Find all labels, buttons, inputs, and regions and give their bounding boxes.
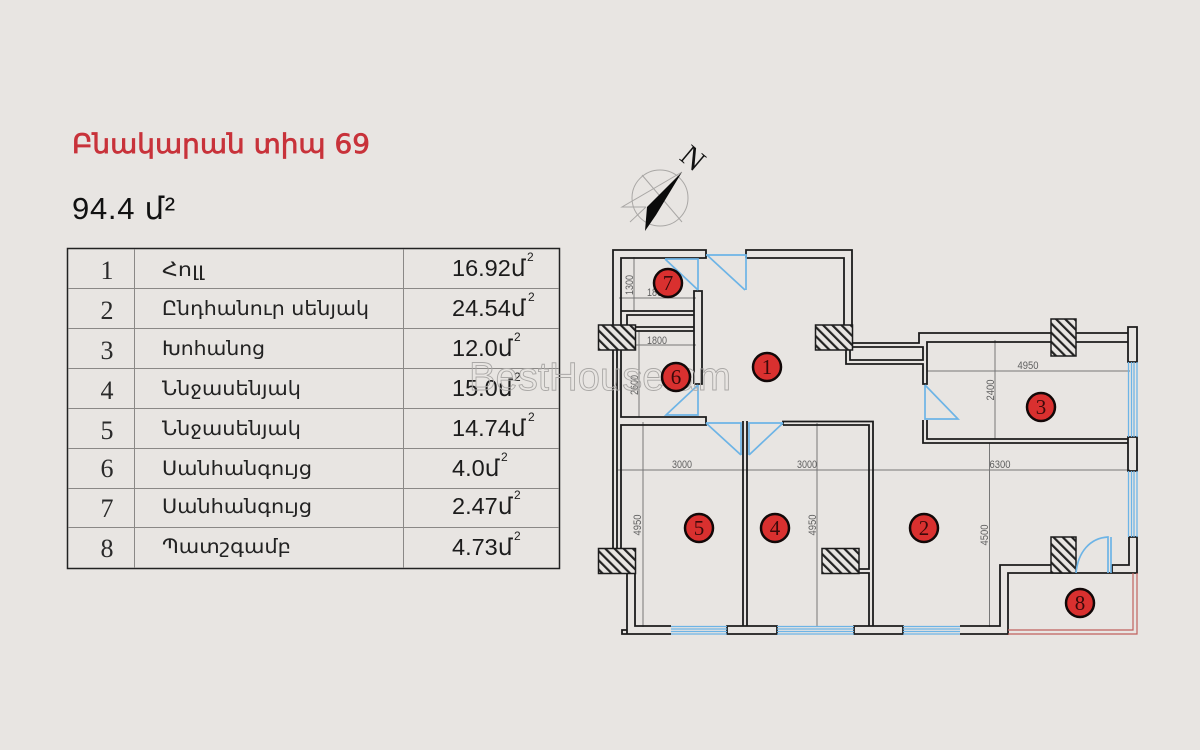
dimension lines: 1800 <box>647 335 667 347</box>
row 7: Սանհանգույց <box>162 495 312 518</box>
dimension lines: 4950 <box>632 514 644 536</box>
row 1: 16.92մ <box>452 255 527 281</box>
row 2: Ընդհանուր սենյակ <box>162 297 369 320</box>
watermark: BestHouse.am <box>469 355 731 399</box>
row 2 <box>100 290 535 325</box>
marker 2 <box>910 514 938 542</box>
balcony railing <box>1008 573 1137 634</box>
row 8 <box>100 529 521 563</box>
row 6: Սանհանգույց <box>162 457 312 480</box>
dimension lines: 4500 <box>979 524 991 546</box>
dimension lines: 2400 <box>985 380 997 400</box>
marker 4: 4 <box>770 516 781 540</box>
row 7: 2 <box>514 488 521 502</box>
row 3: 12.0մ <box>452 335 514 361</box>
row 4: Ննջասենյակ <box>162 377 301 400</box>
row 4: 2 <box>514 370 521 384</box>
marker 8: 8 <box>1075 591 1085 615</box>
row 1: 1 <box>100 256 114 285</box>
marker 2: 2 <box>919 516 929 540</box>
row 1: Հոլլ <box>162 258 205 281</box>
marker 1: 1 <box>762 355 772 379</box>
marker 1 <box>753 353 781 381</box>
row 1 <box>100 250 534 285</box>
row 8: 8 <box>100 534 114 563</box>
row 5: 2 <box>528 410 535 424</box>
row 8: Պատշգամբ <box>162 535 291 558</box>
marker 3 <box>1027 393 1055 421</box>
row 2: 24.54մ <box>452 295 527 321</box>
total area: 94.4 մ² <box>72 191 176 226</box>
icon: north compass <box>622 139 712 231</box>
dimension lines: 2600 <box>629 375 641 395</box>
dimension lines: 6300 <box>990 459 1010 471</box>
row 5 <box>100 410 535 445</box>
floor plan <box>469 250 1137 634</box>
walls <box>613 250 1137 634</box>
dimension lines: 3000 <box>672 459 692 471</box>
row 5: Ննջասենյակ <box>162 417 301 440</box>
row 4: 4 <box>100 376 114 405</box>
row 6: 2 <box>501 450 508 464</box>
row 5: 14.74մ <box>452 415 527 441</box>
row 6: 4.0մ <box>452 455 501 481</box>
row 2: 2 <box>100 296 114 325</box>
row 3 <box>100 330 521 365</box>
row 8: 2 <box>514 529 521 543</box>
dimension lines: 3000 <box>797 459 817 471</box>
row 8: 4.73մ <box>452 534 514 560</box>
row 7 <box>100 488 521 523</box>
hatched columns <box>598 319 1076 574</box>
icon: north compass: N <box>674 139 712 178</box>
row 6 <box>100 450 508 483</box>
row 7: 2.47մ <box>452 493 514 519</box>
dimension lines: 1800 <box>647 287 667 299</box>
marker 8 <box>1066 589 1094 617</box>
row 5: 5 <box>100 416 114 445</box>
row 2: 2 <box>528 290 535 304</box>
row 7: 7 <box>100 494 114 523</box>
room area table <box>68 248 560 568</box>
marker 5 <box>685 514 713 542</box>
row 3: Խոհանոց <box>162 337 265 360</box>
marker 7: 7 <box>663 271 673 295</box>
marker 3: 3 <box>1036 395 1046 419</box>
row 3: 2 <box>514 330 521 344</box>
row 4 <box>100 370 521 405</box>
row 6: 6 <box>100 454 114 483</box>
marker 7 <box>654 269 682 297</box>
dimension lines: 4950 <box>1018 360 1038 372</box>
room markers <box>654 269 1094 617</box>
marker 5: 5 <box>694 516 704 540</box>
title: Բնակարան տիպ 69 <box>72 129 370 160</box>
row 4: 15.0մ <box>452 375 514 401</box>
doors and windows <box>665 255 1137 634</box>
marker 4 <box>761 514 789 542</box>
dimension lines: 1300 <box>624 275 636 295</box>
marker 6 <box>662 363 690 391</box>
dimension lines: 4950 <box>807 514 819 536</box>
row 3: 3 <box>100 336 114 365</box>
dimension lines <box>618 257 1130 627</box>
marker 6: 6 <box>671 365 681 389</box>
row 1: 2 <box>527 250 534 264</box>
